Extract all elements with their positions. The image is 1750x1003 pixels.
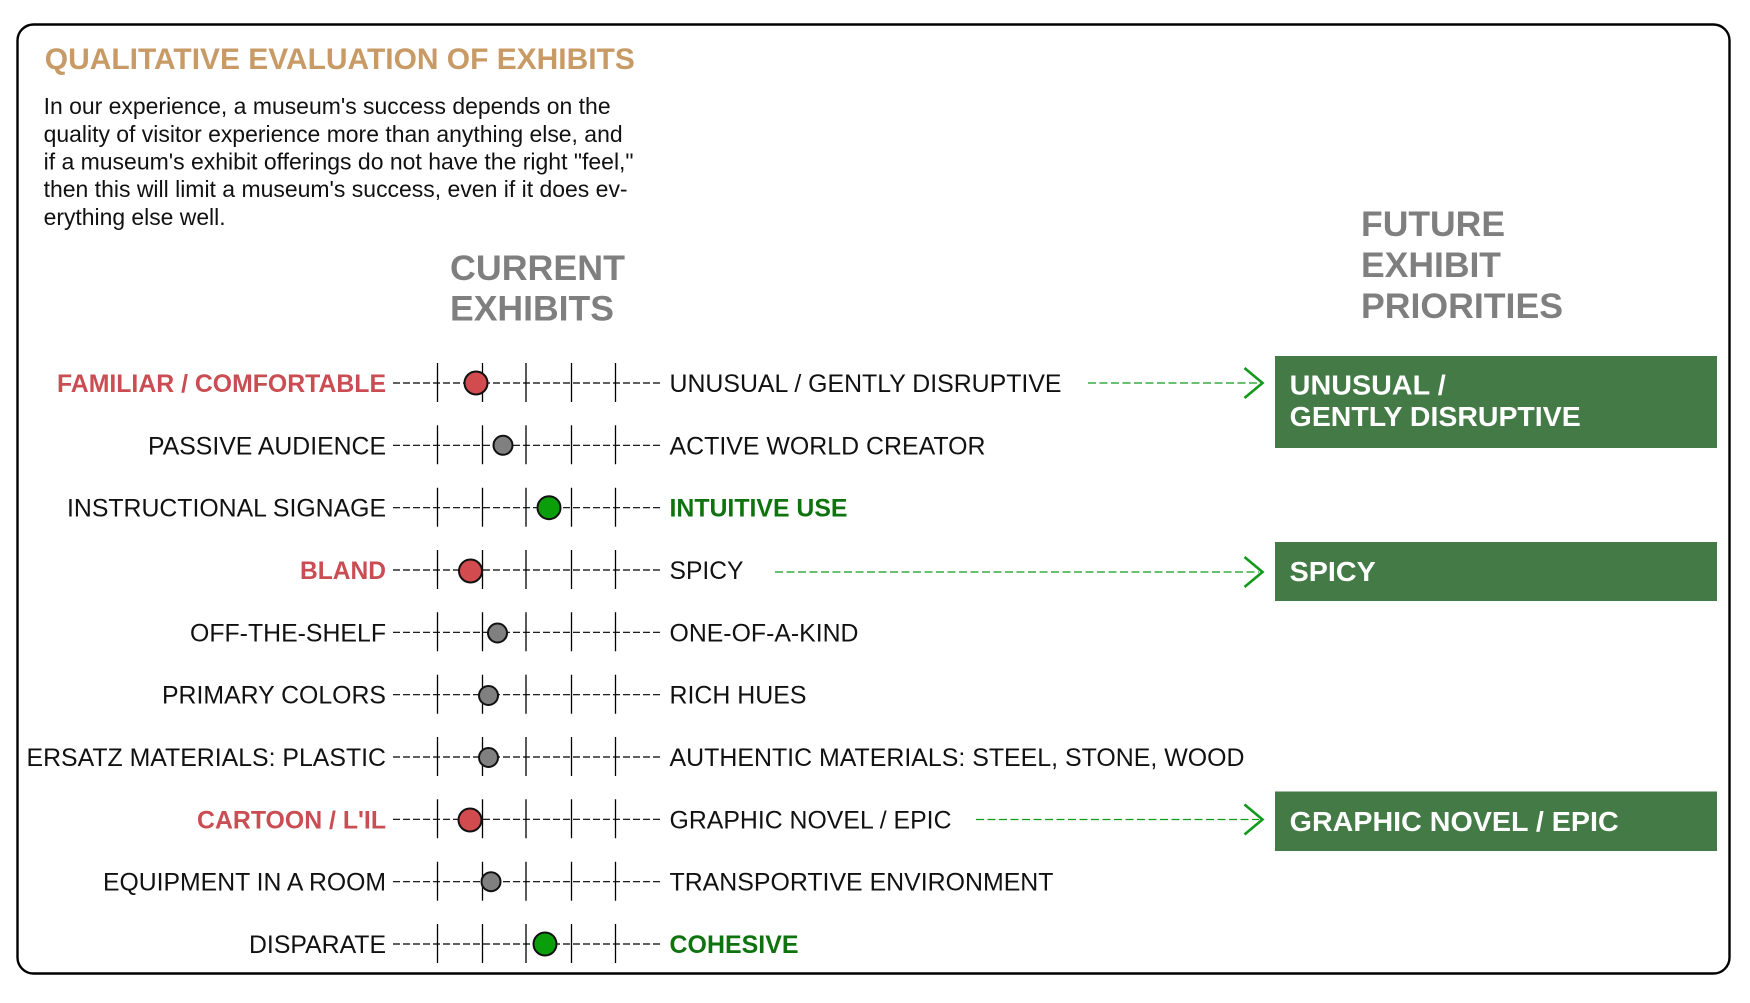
- heading: future exhibit priorities: PRIORITIES: [1361, 286, 1563, 326]
- priority box: graphic novel / epic: GRAPHIC NOVEL / EPIC: [1290, 806, 1619, 837]
- row 7: ersatz to authentic materials: ERSATZ MATERIALS: PLASTIC: [26, 745, 386, 772]
- title: QUALITATIVE EVALUATION OF EXHIBITS: [45, 43, 635, 76]
- row 5: off-the-shelf to one-of-a-kind: ONE-OF-A-KIND: [670, 620, 858, 647]
- text block: intro paragraph: then this will limit a museum's success, even if it does ev-: [44, 176, 628, 202]
- row 10: disparate to cohesive: DISPARATE: [249, 932, 386, 959]
- row 2: passive to active: [148, 425, 986, 464]
- row 9: equipment to transportive: [103, 862, 1054, 901]
- heading: future exhibit priorities: [1361, 204, 1563, 326]
- priority box: spicy: SPICY: [1290, 556, 1376, 587]
- row 4: bland to spicy: SPICY: [670, 558, 744, 585]
- text block: intro paragraph: quality of visitor experience more than anything else, and: [44, 121, 623, 147]
- priority box: unusual / gently disruptive: GENTLY DISRUPTIVE: [1290, 401, 1581, 432]
- row 1: familiar to unusual: FAMILIAR / COMFORTABLE: [57, 371, 386, 398]
- heading: future exhibit priorities: EXHIBIT: [1361, 245, 1501, 285]
- row 8: cartoon to graphic novel: CARTOON / L'IL: [197, 807, 386, 834]
- priority box: spicy: [1275, 542, 1717, 601]
- row 9: equipment to transportive: TRANSPORTIVE ENVIRONMENT: [670, 870, 1054, 897]
- row 1: familiar to unusual: UNUSUAL / GENTLY DISRUPTIVE: [670, 371, 1062, 398]
- text block: intro paragraph: if a museum's exhibit offerings do not have the right "feel,": [44, 148, 634, 174]
- row 6: primary colors to rich hues: [162, 675, 806, 714]
- row 3: instructional to intuitive: [67, 488, 848, 527]
- row 2: passive to active: PASSIVE AUDIENCE: [148, 433, 386, 460]
- row 5: off-the-shelf to one-of-a-kind: [190, 612, 858, 651]
- row 10: disparate to cohesive: [249, 924, 798, 963]
- row 8: cartoon to graphic novel: [197, 799, 952, 838]
- row 3: instructional to intuitive: INSTRUCTIONAL SIGNAGE: [67, 496, 386, 523]
- row 3: instructional to intuitive: INTUITIVE USE: [670, 496, 848, 523]
- arrow: spicy to priority: [775, 557, 1262, 587]
- text block: intro paragraph: [44, 93, 634, 230]
- row 9: equipment to transportive: EQUIPMENT IN A ROOM: [103, 870, 386, 897]
- heading: current exhibits: CURRENT: [450, 248, 625, 288]
- row 1: familiar to unusual: [57, 363, 1062, 402]
- row 4: bland to spicy: [300, 550, 744, 589]
- priority box: unusual / gently disruptive: [1275, 356, 1717, 448]
- row 2: passive to active: ACTIVE WORLD CREATOR: [670, 433, 986, 460]
- row 8: cartoon to graphic novel: GRAPHIC NOVEL / EPIC: [670, 807, 952, 834]
- row 5: off-the-shelf to one-of-a-kind: OFF-THE-SHELF: [190, 620, 386, 647]
- arrow: graphic novel to priority: [976, 804, 1262, 834]
- row 7: ersatz to authentic materials: [26, 737, 1244, 776]
- text block: intro paragraph: erything else well.: [44, 204, 226, 230]
- row 6: primary colors to rich hues: RICH HUES: [670, 683, 806, 710]
- priority box: graphic novel / epic: [1275, 792, 1717, 851]
- row 7: ersatz to authentic materials: AUTHENTIC MATERIALS: STEEL, STONE, WOOD: [670, 745, 1244, 772]
- priority box: unusual / gently disruptive: UNUSUAL /: [1290, 370, 1446, 400]
- arrow: unusual to priority: [1088, 368, 1262, 398]
- row 6: primary colors to rich hues: PRIMARY COLORS: [162, 683, 386, 710]
- heading: current exhibits: [450, 248, 625, 328]
- heading: current exhibits: EXHIBITS: [450, 288, 614, 328]
- text block: intro paragraph: In our experience, a museum's success depends on the: [44, 93, 611, 119]
- row 4: bland to spicy: BLAND: [300, 558, 386, 585]
- row 10: disparate to cohesive: COHESIVE: [670, 932, 798, 959]
- heading: future exhibit priorities: FUTURE: [1361, 204, 1505, 244]
